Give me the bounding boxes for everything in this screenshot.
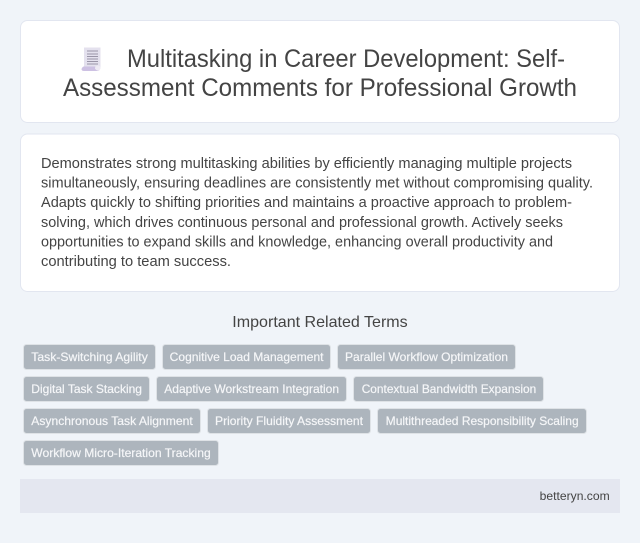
body paragraph: Adapts quickly to shifting priorities and maintains a proactive approach to problem-	[41, 195, 572, 211]
title text: Assessment Comments for Professional Growth	[63, 74, 577, 102]
tag	[378, 408, 586, 434]
tag	[24, 408, 200, 434]
tag	[24, 440, 218, 466]
tag: Digital Task Stacking	[31, 382, 142, 396]
footer domain: betteryn.com	[540, 489, 610, 503]
icon: document scroll	[82, 48, 100, 71]
tag: Parallel Workflow Optimization	[345, 350, 508, 364]
tag: Contextual Bandwidth Expansion	[362, 382, 536, 396]
title text	[63, 45, 577, 102]
tag: Asynchronous Task Alignment	[31, 414, 193, 428]
tag: Adaptive Workstream Integration	[164, 382, 339, 396]
tag	[338, 344, 516, 370]
body paragraph: Demonstrates strong multitasking abilities by efficiently managing multiple projects	[41, 156, 572, 172]
tag: Priority Fluidity Assessment	[215, 414, 364, 428]
body paragraph: opportunities to expand skills and knowledge, enhancing overall productivity and	[41, 234, 553, 250]
tag: Multithreaded Responsibility Scaling	[386, 414, 579, 428]
tag	[24, 344, 156, 370]
footer	[20, 479, 620, 513]
tag	[354, 376, 544, 402]
tag	[156, 376, 346, 402]
body paragraph: simultaneously, ensuring deadlines are consistently met without compromising quality.	[41, 176, 593, 192]
tag: Cognitive Load Management	[170, 350, 324, 364]
body paragraph: solving, which drives continuous personal and professional growth. Actively seeks	[41, 215, 563, 231]
body paragraph	[41, 156, 593, 270]
tag: Workflow Micro-Iteration Tracking	[31, 446, 211, 460]
panel: self-assessment comment card	[20, 134, 620, 292]
panel: term tags	[24, 344, 586, 466]
panel: title card	[20, 20, 620, 122]
tag	[208, 408, 370, 434]
body paragraph: contributing to team success.	[41, 254, 231, 270]
heading: important related terms: Important Related Terms	[232, 314, 408, 331]
tag: Task-Switching Agility	[31, 350, 148, 364]
title text: Multitasking in Career Development: Self-	[127, 45, 565, 73]
tag	[162, 344, 330, 370]
tag	[24, 376, 150, 402]
